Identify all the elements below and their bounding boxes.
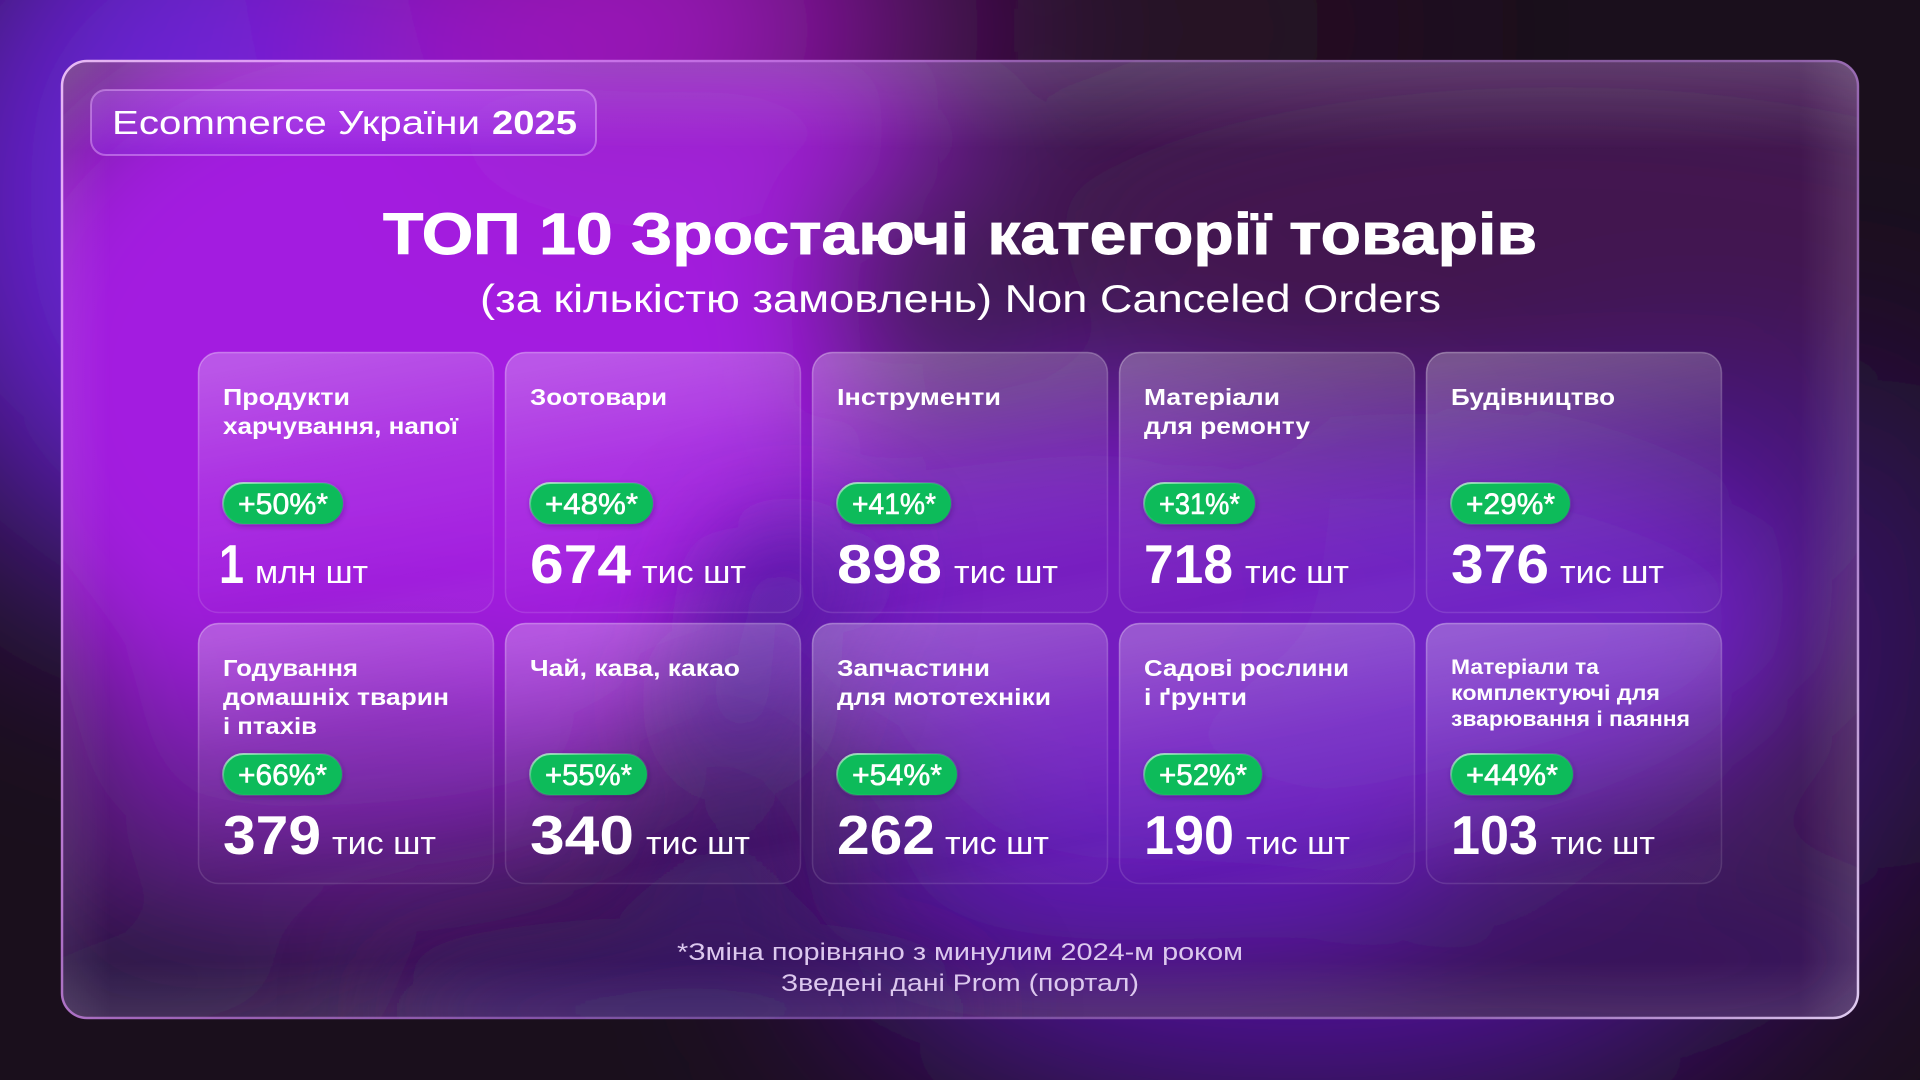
card: Будівництво: 376 bbox=[1451, 533, 1549, 595]
card: Продукти харчування, напої: 1 bbox=[219, 533, 244, 595]
card: Матеріали та комплектуючі для зварювання і паяння bbox=[1426, 624, 1722, 884]
card: Зоотовари: Зоотовари bbox=[530, 384, 667, 410]
card: Запчастини для мототехніки bbox=[812, 624, 1108, 884]
card: Запчастини для мототехніки: Запчастини bbox=[837, 655, 990, 681]
card: Чай, кава, какао bbox=[506, 624, 800, 884]
card: Годування домашніх тварин і птахів: і птахів bbox=[223, 713, 317, 739]
card: Годування домашніх тварин і птахів: +66%* bbox=[238, 759, 327, 792]
footnote bbox=[677, 939, 1243, 997]
card: Матеріали для ремонту: 718 bbox=[1144, 533, 1233, 595]
card: Чай, кава, какао: Чай, кава, какао bbox=[530, 655, 740, 681]
card: Інструменти: тис шт bbox=[954, 554, 1058, 590]
card: Запчастини для мототехніки: +54%* bbox=[852, 759, 942, 792]
card: Інструменти: 898 bbox=[837, 533, 942, 595]
subtitle: (за кількістю замовлень) Non Canceled Orders bbox=[480, 278, 1441, 321]
card: Годування домашніх тварин і птахів bbox=[198, 624, 494, 884]
card: Матеріали та комплектуючі для зварювання і паяння: 103 bbox=[1451, 804, 1538, 866]
footnote: *Зміна порівняно з минулим 2024-м роком bbox=[677, 939, 1243, 966]
card: Інструменти: Інструменти bbox=[837, 384, 1001, 410]
card: Садові рослини і ґрунти: Садові рослини bbox=[1144, 655, 1349, 681]
card: Матеріали та комплектуючі для зварювання і паяння: зварювання і паяння bbox=[1451, 708, 1690, 731]
card: Зоотовари: тис шт bbox=[642, 554, 746, 590]
card: Запчастини для мототехніки: тис шт bbox=[945, 825, 1049, 861]
card: Годування домашніх тварин і птахів: Годування bbox=[223, 655, 358, 681]
card: Зоотовари: 674 bbox=[530, 533, 631, 595]
card: Інструменти: +41%* bbox=[852, 488, 936, 521]
card: Годування домашніх тварин і птахів: домашніх тварин bbox=[223, 684, 449, 710]
card: Садові рослини і ґрунти: +52%* bbox=[1159, 759, 1247, 792]
card: Запчастини для мототехніки: 262 bbox=[837, 804, 935, 866]
footnote: Зведені дані Prom (портал) bbox=[781, 970, 1139, 997]
card: Інструменти bbox=[812, 352, 1108, 612]
card: Матеріали для ремонту bbox=[1120, 352, 1414, 612]
card: Продукти харчування, напої: +50%* bbox=[238, 488, 328, 521]
card: Годування домашніх тварин і птахів: 379 bbox=[223, 804, 321, 866]
card: Продукти харчування, напої bbox=[198, 352, 494, 612]
card: Матеріали та комплектуючі для зварювання і паяння: тис шт bbox=[1551, 825, 1655, 861]
card: Матеріали для ремонту: Матеріали bbox=[1144, 384, 1280, 410]
card: Садові рослини і ґрунти: і ґрунти bbox=[1144, 684, 1247, 710]
tag: Ecommerce України 2025: Ecommerce України bbox=[112, 104, 480, 141]
card: Зоотовари: +48%* bbox=[545, 488, 638, 521]
card: Продукти харчування, напої: харчування, напої bbox=[223, 413, 460, 439]
card: Матеріали та комплектуючі для зварювання і паяння: +44%* bbox=[1466, 759, 1558, 792]
card: Матеріали для ремонту: +31%* bbox=[1159, 488, 1240, 521]
card: Будівництво bbox=[1426, 352, 1722, 612]
tag: Ecommerce України 2025 bbox=[91, 90, 596, 155]
card: Продукти харчування, напої: млн шт bbox=[255, 554, 368, 590]
card: Садові рослини і ґрунти bbox=[1120, 624, 1414, 884]
card: Запчастини для мототехніки: для мототехніки bbox=[837, 684, 1051, 710]
card: Матеріали для ремонту: для ремонту bbox=[1144, 413, 1310, 439]
card: Матеріали та комплектуючі для зварювання і паяння: Матеріали та bbox=[1451, 656, 1599, 679]
card: Садові рослини і ґрунти: 190 bbox=[1144, 804, 1234, 866]
card: Зоотовари bbox=[506, 352, 800, 612]
card: Чай, кава, какао: 340 bbox=[530, 804, 634, 866]
card: Будівництво: Будівництво bbox=[1451, 384, 1615, 410]
card: Продукти харчування, напої: Продукти bbox=[223, 384, 350, 410]
card: Будівництво: тис шт bbox=[1560, 554, 1664, 590]
card: Матеріали для ремонту: тис шт bbox=[1245, 554, 1349, 590]
card: Будівництво: +29%* bbox=[1466, 488, 1555, 521]
card: Чай, кава, какао: +55%* bbox=[545, 759, 632, 792]
title: ТОП 10 Зростаючі категорії товарів bbox=[383, 202, 1537, 267]
card: Годування домашніх тварин і птахів: тис шт bbox=[332, 825, 436, 861]
card: Садові рослини і ґрунти: тис шт bbox=[1246, 825, 1350, 861]
card: Чай, кава, какао: тис шт bbox=[646, 825, 750, 861]
tag: Ecommerce України 2025: 2025 bbox=[492, 104, 577, 141]
card: Матеріали та комплектуючі для зварювання і паяння: комплектуючі для bbox=[1451, 682, 1660, 705]
